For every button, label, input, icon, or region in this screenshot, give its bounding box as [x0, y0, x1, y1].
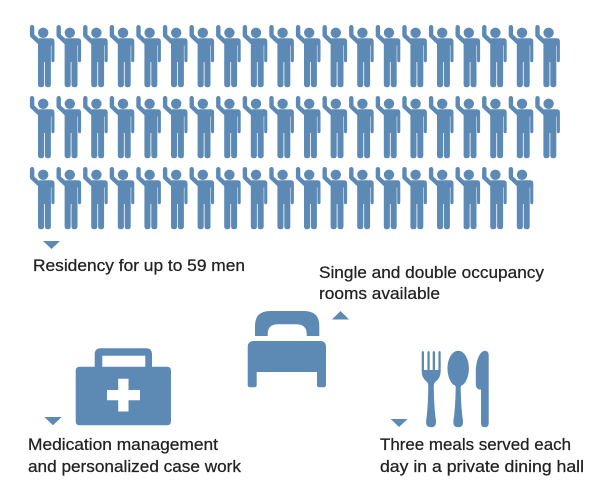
pointer: meals	[391, 419, 408, 427]
text: room types	[319, 264, 545, 303]
knife	[476, 351, 489, 427]
icon: bed	[248, 311, 326, 387]
pointer: residency	[43, 241, 60, 249]
text: medication	[28, 436, 242, 476]
icon: cutlery	[422, 351, 489, 427]
text: meals	[380, 436, 584, 476]
row 2 of people	[32, 98, 560, 158]
pointer: medication	[44, 417, 62, 425]
text: room types: rooms available	[319, 285, 440, 303]
pictogram: 59 men	[32, 27, 560, 229]
text: meals: Three meals served each	[380, 436, 571, 454]
spoon	[448, 351, 469, 427]
pointer: rooms	[332, 311, 349, 320]
text: medication: Medication management	[28, 436, 218, 454]
text: room types: Single and double occupancy	[319, 264, 545, 282]
text: residency: Residency for up to 59 men	[33, 257, 245, 275]
fork	[422, 351, 441, 427]
row 3 of people	[32, 169, 533, 229]
text: meals: day in a private dining hall	[380, 458, 584, 476]
text: medication: and personalized case work	[28, 458, 242, 476]
icon: medical kit	[76, 348, 171, 425]
row 1 of people	[32, 27, 560, 87]
